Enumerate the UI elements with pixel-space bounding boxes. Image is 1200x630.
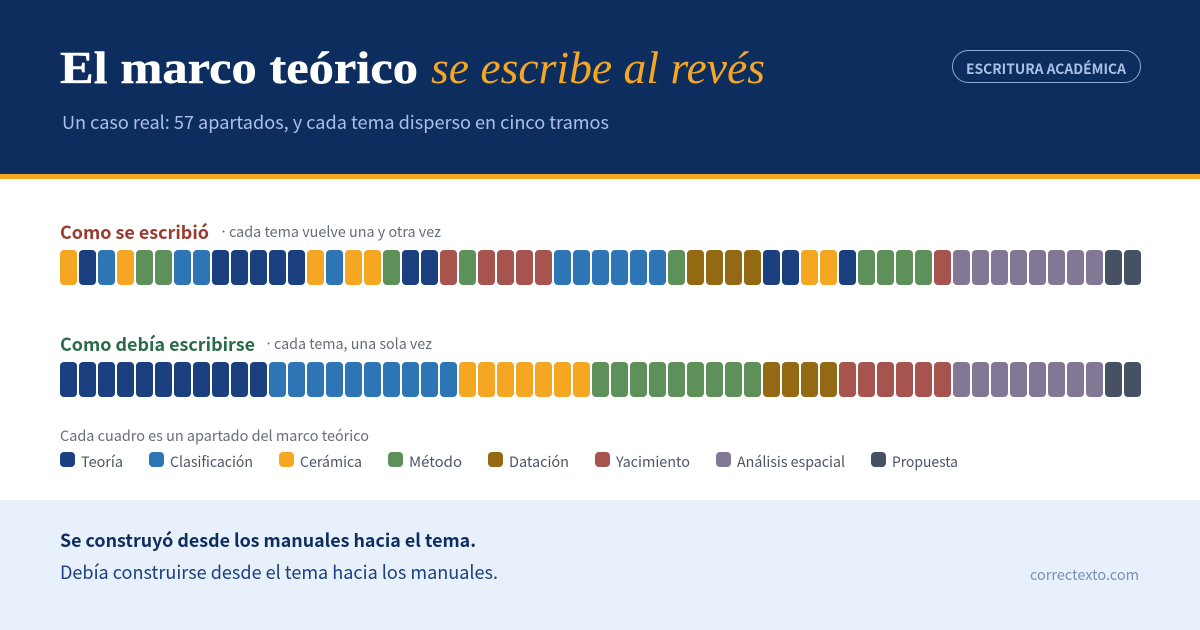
legend item: Análisis espacial: Análisis espacial — [737, 451, 845, 472]
legend item: Método: Método — [409, 451, 462, 472]
legend item: Método — [388, 451, 462, 472]
legend item: Teoría: Teoría — [81, 451, 123, 472]
heading: como debía escribirse: Como debía escribirse — [60, 331, 255, 357]
legend item: Cerámica: Cerámica — [300, 451, 362, 472]
legend item: Datación: Datación — [509, 451, 569, 472]
conclusion: cómo se construyó: Se construyó desde los manuales hacia el tema. — [60, 527, 476, 553]
badge: ESCRITURA ACADÉMICA — [966, 59, 1127, 79]
title: se escribe al revés — [431, 42, 765, 93]
panel: header — [0, 0, 1200, 179]
conclusion: cómo debía construirse: Debía construirse desde el tema hacia los manuales. — [60, 559, 498, 585]
legend item: Teoría — [60, 451, 123, 472]
heading: como se escribió — [60, 219, 441, 245]
chart: secuencia real de 57 apartados — [60, 250, 1141, 285]
legend item: Clasificación: Clasificación — [170, 451, 253, 472]
heading: como debía escribirse — [60, 331, 432, 357]
legend item: Yacimiento: Yacimiento — [615, 451, 690, 472]
heading: como debía escribirse: · — [264, 333, 273, 354]
badge — [952, 50, 1140, 82]
heading: como debía escribirse: cada tema, una sola vez — [274, 333, 432, 354]
heading: como se escribió: cada tema vuelve una y otra vez — [229, 221, 441, 242]
subtitle: Un caso real: 57 apartados, y cada tema disperso en cinco tramos — [62, 109, 609, 135]
legend item: Propuesta: Propuesta — [892, 451, 958, 472]
heading: como se escribió: Como se escribió — [60, 219, 209, 245]
title: El marco teórico — [60, 42, 418, 93]
legend — [60, 451, 958, 472]
legend caption: Cada cuadro es un apartado del marco teórico — [60, 425, 369, 446]
chart: secuencia ordenada de 57 apartados — [60, 362, 1141, 397]
panel: footer — [0, 500, 1200, 630]
title — [60, 42, 765, 93]
heading: como se escribió: · — [220, 221, 228, 242]
source: correctexto.com — [1030, 564, 1139, 585]
